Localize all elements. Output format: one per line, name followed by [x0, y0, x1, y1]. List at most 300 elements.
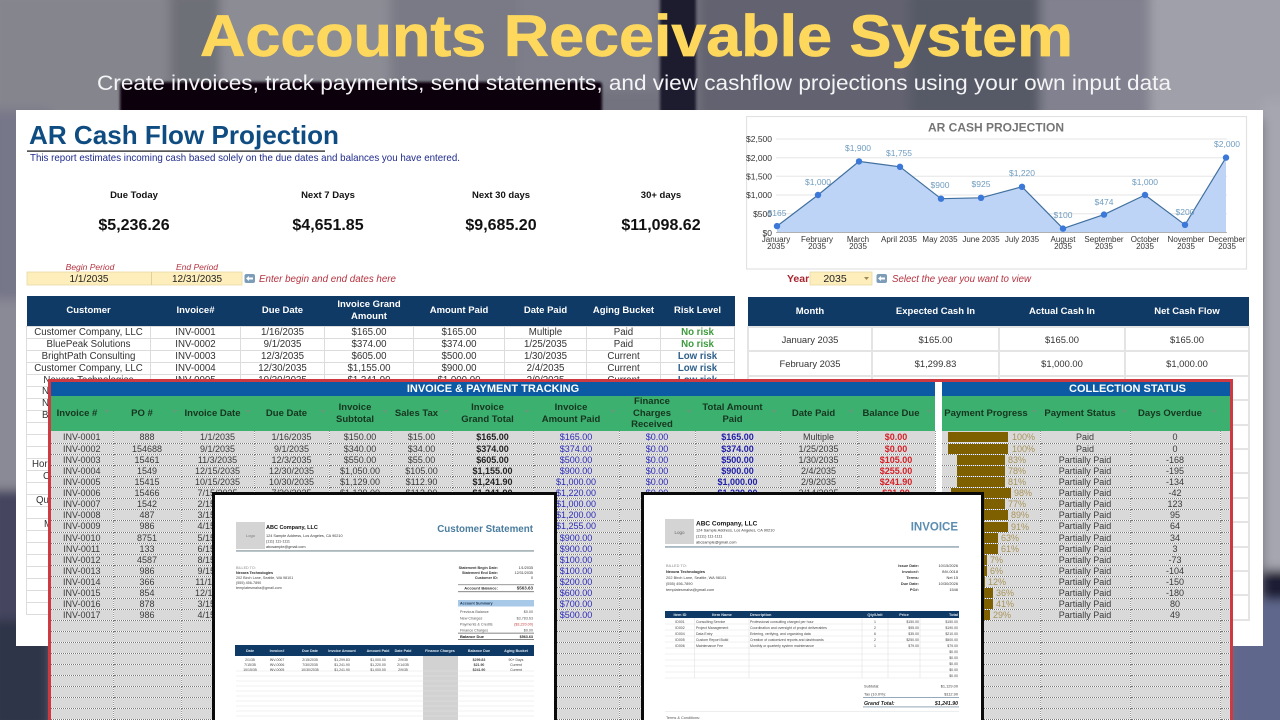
table: invoice and payment tracking: $0.00 [885, 432, 907, 442]
table: collection status: Partially Paid [1059, 510, 1111, 520]
chart: AR cash projection: February [801, 235, 833, 244]
table: invoice and payment tracking: 154688 [132, 444, 162, 454]
statement logo [236, 522, 265, 549]
table: collection status: -168 [1166, 454, 1184, 464]
table: invoice and payment tracking: $500.00 [560, 610, 592, 620]
table: invoice and payment tracking: $165.00 [560, 432, 592, 442]
table: invoice and payment tracking: INV-0016 [63, 598, 101, 608]
table: collection status: 49 [1170, 610, 1180, 620]
table: invoice and payment tracking: Multiple [803, 432, 834, 442]
KPI summary row: $9,685.20 [465, 217, 537, 234]
invoice company block: 124 Sample Address, Los Angeles, CA 90210 [696, 528, 775, 532]
statement billed to: BILLED TO: [236, 566, 256, 570]
date period inputs [26, 262, 396, 286]
payment progress bars: 63% [1001, 533, 1019, 543]
KPI summary row: Next 7 Days [301, 190, 355, 201]
statement account summary: Balance Due [460, 634, 485, 639]
table: monthly cash flow: $165.00 [1170, 334, 1204, 345]
table: monthly cash flow [747, 297, 1250, 621]
table: monthly cash flow: February 2035 [780, 358, 840, 369]
invoice totals: Subtotal: [864, 684, 879, 688]
chart: AR cash projection: $1,000 [746, 190, 772, 200]
table: collection status: Partially Paid [1059, 466, 1111, 476]
statement table: Current [510, 663, 522, 667]
statement table: Finance Charges [425, 649, 455, 653]
statement table: 7/15/35 [244, 663, 256, 667]
table: invoice and payment tracking: $0.00 [646, 476, 668, 486]
table: invoice and payment tracking: INV-0009 [63, 521, 101, 531]
invoice line items table: $79.00 [947, 644, 958, 648]
statement company block: ABC Company, LLC [266, 525, 318, 531]
statement table: 2/1/35 [245, 658, 255, 662]
table: collection status: -42 [1168, 488, 1182, 498]
table: invoice and payment tracking: $1,220.00 [556, 488, 596, 498]
table: invoice and payment tracking: 2/15/2035 [197, 498, 238, 508]
table: invoice and payment tracking: 8751 [137, 532, 157, 542]
statement account summary [458, 600, 534, 640]
statement company block: 124 Sample Address, Los Angeles, CA 90210 [266, 534, 343, 538]
chart: AR cash projection: $1,755 [886, 148, 912, 158]
statement table: $1,241.90 [334, 668, 350, 672]
invoice line items table: 2 [874, 626, 876, 630]
table: invoice and payment tracking: 3/15/2035 [197, 510, 238, 520]
statement account summary: $0.00 [524, 610, 533, 614]
invoice line items table: Coordination and oversight of project deliverables [750, 626, 827, 630]
table: invoice and payment tracking: 15461 [134, 454, 160, 464]
statement table: 10/30/2035 [301, 668, 319, 672]
payment progress bars: 89% [1011, 510, 1029, 520]
statement table: 90+ Days [509, 658, 524, 662]
invoice line items table: ID005 [675, 638, 685, 642]
chart: AR cash projection: $474 [1095, 197, 1114, 207]
table: invoice aging and risk: $900.00 [441, 363, 477, 374]
table: invoice and payment tracking [51, 396, 936, 720]
chart: AR cash projection: $100 [1054, 210, 1073, 220]
KPI summary row: Due Today [110, 190, 159, 201]
table: invoice aging and risk: $374.00 [441, 339, 477, 350]
statement meta: Account Balance: [464, 586, 498, 590]
table: invoice and payment tracking: $21.90 [882, 488, 910, 498]
report heading: AR Cash Flow Projection [29, 120, 339, 150]
table: invoice and payment tracking: Invoice [471, 402, 504, 413]
invoice company block [696, 520, 775, 544]
table: invoice aging and risk [26, 296, 735, 615]
table: invoice aging and risk: N [42, 386, 49, 397]
table: invoice and payment tracking: $165.00 [476, 432, 509, 442]
chart: AR cash projection: June 2035 [962, 235, 1000, 244]
table: invoice and payment tracking: $241.90 [880, 476, 912, 486]
table: invoice and payment tracking: $340.00 [344, 444, 376, 454]
table: invoice aging and risk: No risk [681, 327, 714, 338]
table: invoice aging and risk: 12/3/2035 [261, 351, 304, 362]
invoice meta: INV-0018 [942, 569, 958, 574]
statement meta: 0 [531, 576, 533, 580]
table: invoice and payment tracking: Grand Total [461, 414, 514, 424]
table: invoice aging and risk: Customer [66, 305, 111, 316]
table: invoice aging and risk: INV-0005 [175, 375, 216, 386]
invoice billed to: BILLED TO: [666, 563, 687, 568]
table: invoice and payment tracking: 1/25/2035 [798, 444, 839, 454]
statement table: Date [246, 649, 254, 653]
statement billed to: 202 Birch Lane, Seattle, WA 98101 [236, 576, 293, 580]
invoice line items table: $95.00 [908, 626, 919, 630]
table: invoice and payment tracking: 1542 [137, 498, 157, 508]
table: invoice and payment tracking: $550.00 [344, 454, 376, 464]
table: invoice and payment tracking: Total Amount [702, 402, 763, 413]
statement account summary: ($3,220.00) [514, 622, 533, 626]
table: invoice and payment tracking: $150.00 [344, 432, 376, 442]
chart: AR cash projection: April 2035 [881, 235, 918, 244]
table: invoice and payment tracking: 2/4/2035 [801, 466, 836, 476]
table: invoice and payment tracking: Invoice Date [185, 408, 240, 419]
statement table: INV-0006 [270, 663, 284, 667]
table: invoice aging and risk: INV-0004 [175, 363, 216, 374]
invoice line items table: Item ID [674, 612, 687, 617]
table: invoice aging and risk: Low risk [678, 363, 717, 374]
table: collection status: Payment Status [1044, 408, 1116, 419]
table: invoice aging and risk: Qu [36, 495, 49, 506]
statement title: Customer Statement [437, 524, 534, 535]
invoice line items table: ID002 [675, 626, 685, 630]
chart: AR cash projection: $2,500 [746, 134, 772, 144]
statement billed to: (555) 456-7890 [236, 581, 261, 585]
table: invoice and payment tracking: $1,200.00 [556, 510, 596, 520]
chart: AR cash projection: $1,000 [1132, 177, 1158, 187]
invoice line items table: Price [899, 612, 910, 617]
table: invoice and payment tracking: Date Paid [792, 408, 835, 419]
table: invoice and payment tracking: 9/1/2035 [274, 444, 309, 454]
table: invoice and payment tracking: $374.00 [721, 444, 754, 454]
invoice totals: $1,129.00 [941, 684, 959, 688]
table: invoice and payment tracking: 4587 [137, 554, 157, 564]
table: collection status: -134 [1166, 476, 1184, 486]
statement account summary: $0.00 [524, 628, 533, 632]
table: invoice aging and risk: 1/30/2035 [524, 351, 567, 362]
invoice meta: 10/15/2026 [939, 563, 958, 568]
table: invoice and payment tracking: 11/15/2035 [195, 576, 240, 586]
table: invoice aging and risk: 9/1/2035 [264, 339, 301, 350]
table: collection status: -73 [1168, 554, 1182, 564]
table: monthly cash flow: Month [796, 306, 824, 317]
table: invoice and payment tracking: INV-0007 [63, 498, 101, 508]
table: monthly cash flow: Net Cash Flow [1154, 306, 1220, 317]
table: invoice aging and risk: Low risk [678, 375, 717, 386]
table: monthly cash flow: Expected Cash In [896, 306, 975, 317]
table: invoice aging and risk: BrightPath Consulting [42, 351, 135, 362]
table: invoice and payment tracking: $100.00 [560, 566, 592, 576]
table: invoice aging and risk: Nexora Technologies [43, 375, 134, 386]
table: invoice and payment tracking: $0.00 [646, 432, 668, 442]
payment progress bars: 41% [996, 599, 1014, 609]
statement table: $1,000.00 [370, 668, 386, 672]
table: invoice and payment tracking: $55.00 [408, 454, 435, 464]
statement table: INV-0005 [270, 668, 284, 672]
chart: AR cash projection: $925 [972, 179, 991, 189]
table: invoice aging and risk: $1,155.00 [347, 363, 391, 374]
invoice line items table: Professional consulting charged per hour [750, 620, 814, 624]
chart: AR cash projection: 2035 [1218, 242, 1236, 251]
table: invoice and payment tracking: INV-0005 [63, 476, 101, 486]
table: invoice aging and risk: Risk Level [674, 305, 721, 316]
statement account summary: Account Summary [460, 602, 494, 606]
table: collection status: 0 [1172, 432, 1178, 442]
chart: AR cash projection: $900 [931, 180, 950, 190]
table: invoice and payment tracking: 133 [139, 544, 155, 554]
title: Accounts Receivable System [200, 5, 1073, 69]
statement table [235, 645, 534, 720]
invoice logo [665, 519, 694, 544]
invoice meta: Net 15 [947, 575, 958, 580]
statement table: Current [510, 668, 522, 672]
table: invoice aging and risk: $1,000.00 [437, 375, 481, 386]
invoice line items table: $250.00 [906, 638, 919, 642]
statement table: 10/15/35 [243, 668, 257, 672]
table: monthly cash flow: $165.00 [919, 334, 952, 345]
statement meta [458, 566, 534, 592]
payment progress bars: 29% [993, 610, 1011, 620]
invoice line items table: $500.00 [945, 638, 958, 642]
table: invoice and payment tracking: $1,000.00 [717, 476, 758, 486]
payment progress bars: 98% [1014, 488, 1032, 498]
table: invoice and payment tracking: $500.00 [721, 454, 754, 464]
invoice line items table: $0.00 [949, 674, 958, 678]
statement meta: $563.63 [517, 586, 533, 590]
table: monthly cash flow: Actual Cash In [1029, 306, 1095, 317]
table: invoice aging and risk: 1/25/2035 [524, 339, 567, 350]
table: invoice and payment tracking: $374.00 [476, 444, 509, 454]
statement account summary: New Charges [460, 616, 482, 620]
invoice billed to: Nexora Technologies [666, 569, 705, 574]
table: invoice and payment tracking: INV-0004 [63, 466, 101, 476]
table: invoice and payment tracking: 1549 [137, 466, 157, 476]
invoice line items table: $35.00 [908, 632, 919, 636]
chart: AR cash projection: $165 [768, 208, 787, 218]
invoice line items table: Creation of customized reports and dashboards [750, 638, 824, 642]
invoice totals: $112.90 [944, 692, 959, 696]
statement table: $1,000.00 [370, 658, 386, 662]
table: collection status: Partially Paid [1059, 598, 1111, 608]
table: collection status: Paid [1076, 444, 1094, 454]
table: invoice aging and risk: 10/30/2035 [258, 375, 307, 386]
chart: AR cash projection: August [1051, 235, 1076, 244]
statement billed to: templatesmaha@gmail.com [236, 586, 282, 590]
table: invoice aging and risk: 1/16/2035 [261, 327, 304, 338]
table: invoice aging and risk: Current [607, 375, 640, 386]
table: invoice aging and risk: Paid [614, 327, 633, 338]
chart: AR cash projection: $1,000 [805, 177, 831, 187]
chart: AR cash projection: 2035 [1095, 242, 1113, 251]
invoice logo: Logo [674, 530, 685, 535]
table: invoice and payment tracking: $900.00 [560, 532, 592, 542]
invoice terms: Terms & Conditions: [666, 716, 700, 720]
chart: AR cash projection: $2,000 [1214, 139, 1240, 149]
table: invoice and payment tracking: 878 [139, 598, 155, 608]
statement logo: Logo [246, 533, 256, 538]
table: invoice and payment tracking: $1,241.90 [472, 488, 513, 498]
payment progress bars: 81% [1008, 477, 1026, 487]
table: invoice and payment tracking: $1,000.00 [556, 476, 596, 486]
payment progress bars: 78% [1008, 466, 1026, 476]
invoice billed to [666, 563, 726, 592]
statement table: 2/9/35 [398, 658, 408, 662]
table: invoice aging and risk: $165.00 [351, 327, 387, 338]
table: collection status: 95 [1170, 510, 1180, 520]
table: collection status: -150 [1166, 576, 1184, 586]
table: invoice and payment tracking: $1,129.00 [340, 476, 380, 486]
statement table: Balance Due [468, 649, 490, 653]
table: invoice aging and risk: Customer Company, LLC [34, 363, 143, 374]
table: invoice and payment tracking: Subtotal [336, 414, 374, 424]
KPI summary row: $5,236.26 [98, 217, 170, 234]
invoice billed to: templatesmaha@gmail.com [666, 587, 714, 592]
table: invoice and payment tracking: $1,050.00 [340, 466, 380, 476]
statement billed to [236, 566, 293, 590]
heading: collection status [942, 382, 1230, 396]
table: invoice and payment tracking: 12/15/2035 [195, 588, 240, 598]
invoice totals: Tax (10.0%): [864, 692, 886, 696]
table: invoice aging and risk: No risk [681, 339, 714, 350]
report heading [27, 120, 460, 164]
invoice line items table: $210.00 [945, 632, 958, 636]
table: invoice and payment tracking: 5/15/2035 [197, 532, 238, 542]
chart: AR cash projection: September [1084, 235, 1124, 244]
table: invoice and payment tracking: INV-0011 [63, 544, 100, 554]
table: invoice and payment tracking: INV-0008 [63, 510, 101, 520]
KPI summary row: $4,651.85 [292, 217, 364, 234]
table: invoice aging and risk: Customer Company, LLC [34, 327, 143, 338]
payment progress bars: 12% [988, 577, 1006, 587]
chart: AR cash projection: $200 [1176, 207, 1195, 217]
statement company block: abcsample@gmail.com [266, 545, 306, 549]
chart: AR cash projection: 2035 [808, 242, 826, 251]
table: invoice and payment tracking: 11/3/2035 [198, 454, 237, 464]
heading: collection status: COLLECTION STATUS [1069, 383, 1186, 395]
statement table: Amount Paid [367, 649, 390, 653]
table: invoice aging and risk: $500.00 [441, 351, 477, 362]
table: invoice and payment tracking: 10/30/2035 [269, 476, 314, 486]
table: invoice aging and risk: Multiple [529, 327, 562, 338]
invoice line items table: ID006 [675, 644, 685, 648]
statement account summary: Payments & Credits [460, 622, 493, 626]
chart: AR cash projection: July 2035 [1005, 235, 1040, 244]
invoice meta: Issue Date: [898, 563, 919, 568]
table: invoice and payment tracking: $0.00 [646, 444, 668, 454]
table: invoice and payment tracking: $112.90 [406, 488, 437, 498]
table: invoice and payment tracking: 986 [139, 610, 155, 620]
table: invoice and payment tracking: INV-0010 [63, 532, 101, 542]
year selector: Select the year you want to view [892, 274, 1032, 285]
table: invoice and payment tracking: INV-0006 [63, 488, 101, 498]
statement meta: Statement End Date: [462, 571, 498, 575]
statement table: Aging Bucket [504, 649, 529, 653]
statement billed to: Nexora Technologies [236, 571, 273, 575]
table: invoice and payment tracking: $15.00 [408, 432, 435, 442]
table: invoice and payment tracking: 3/15/2035 [197, 598, 238, 608]
table: invoice and payment tracking: $200.00 [560, 576, 592, 586]
table: invoice and payment tracking: 366 [139, 576, 155, 586]
invoice line items table: Entering, verifying, and organizing data [750, 632, 811, 636]
payment progress bars: 36% [996, 588, 1014, 598]
table: invoice and payment tracking: Invoice [339, 402, 371, 413]
table: invoice and payment tracking: Received [631, 419, 673, 430]
statement table: $241.90 [473, 668, 485, 672]
table: collection status: -195 [1166, 466, 1184, 476]
statement table: Due Date [302, 649, 318, 653]
chart: AR cash projection [746, 116, 1247, 270]
table: invoice and payment tracking: $0.00 [646, 488, 668, 498]
invoice line items table: 1 [874, 644, 876, 648]
table: invoice and payment tracking: 15466 [134, 488, 160, 498]
invoice company block: (1111) 111-1111 [696, 534, 722, 538]
statement account summary: Finance Charges [460, 628, 488, 632]
panel: customer statement document [212, 492, 557, 720]
payment progress bars: 100% [1012, 432, 1035, 442]
table: invoice and payment tracking: 12/3/2035 [271, 454, 312, 464]
table: invoice and payment tracking: $100.00 [560, 554, 592, 564]
chart: AR cash projection: $1,220 [1009, 168, 1035, 178]
table: invoice and payment tracking: $700.00 [560, 598, 592, 608]
table: invoice and payment tracking: $1,155.00 [472, 466, 513, 476]
table: collection status: 64 [1170, 521, 1180, 531]
statement meta: 1/1/2035 [519, 566, 533, 570]
table: invoice and payment tracking: INV-0003 [63, 454, 101, 464]
chart: AR cash projection: May 2035 [922, 235, 958, 244]
chart: AR cash projection: December [1209, 235, 1246, 244]
statement table: INV-0007 [270, 658, 284, 662]
invoice line items table: ID004 [675, 632, 685, 636]
table: collection status: -180 [1166, 588, 1184, 598]
table: collection status: Partially Paid [1059, 610, 1111, 620]
table: collection status: Partially Paid [1059, 576, 1111, 586]
table: invoice and payment tracking: INV-0012 [63, 554, 101, 564]
table: invoice and payment tracking: 7/30/2035 [271, 488, 312, 498]
table: collection status: 0 [1172, 444, 1178, 454]
table: invoice aging and risk: N [42, 398, 49, 409]
table: invoice aging and risk: Hor [32, 459, 48, 470]
table: invoice and payment tracking: 487 [139, 510, 155, 520]
invoice line items table: Total [949, 612, 958, 617]
table: invoice and payment tracking: $1,000.00 [556, 498, 596, 508]
date period inputs: Enter begin and end dates here [259, 274, 396, 285]
table: invoice and payment tracking: $1,129.00 [340, 488, 380, 498]
table: invoice and payment tracking: 6/15/2035 [197, 544, 238, 554]
table: invoice and payment tracking: 1/16/2035 [271, 432, 312, 442]
table: invoice aging and risk: Current [607, 363, 640, 374]
invoice line items table: 1 [874, 620, 876, 624]
table: invoice and payment tracking: 4/15/2035 [197, 610, 238, 620]
table: invoice and payment tracking: $0.00 [646, 454, 668, 464]
table: invoice and payment tracking: $1,255.00 [556, 521, 596, 531]
invoice meta: Due Date: [901, 581, 919, 586]
table: monthly cash flow: $1,299.83 [915, 358, 956, 369]
chart: AR cash projection: $1,500 [746, 172, 772, 182]
chart: AR cash projection: 2035 [767, 242, 785, 251]
statement table: 7/30/2035 [302, 663, 318, 667]
table: invoice aging and risk: M [44, 519, 52, 530]
table: invoice and payment tracking: $900.00 [560, 466, 592, 476]
table: invoice aging and risk: Paid [614, 339, 633, 350]
table: invoice and payment tracking: 9/15/2035 [197, 566, 238, 576]
date period inputs: End Period [176, 262, 218, 272]
table: collection status: Partially Paid [1059, 454, 1111, 464]
invoice billed to: 202 Birch Lane, Seattle, WA 98101 [666, 575, 726, 580]
chart: AR cash projection: 2035 [1136, 242, 1154, 251]
table: collection status: Partially Paid [1059, 566, 1111, 576]
invoice line items table: 2 [874, 638, 876, 642]
table: invoice and payment tracking: 1/30/2035 [798, 454, 839, 464]
table: invoice and payment tracking: $105.00 [880, 454, 912, 464]
chart: AR cash projection: $1,900 [845, 143, 871, 153]
